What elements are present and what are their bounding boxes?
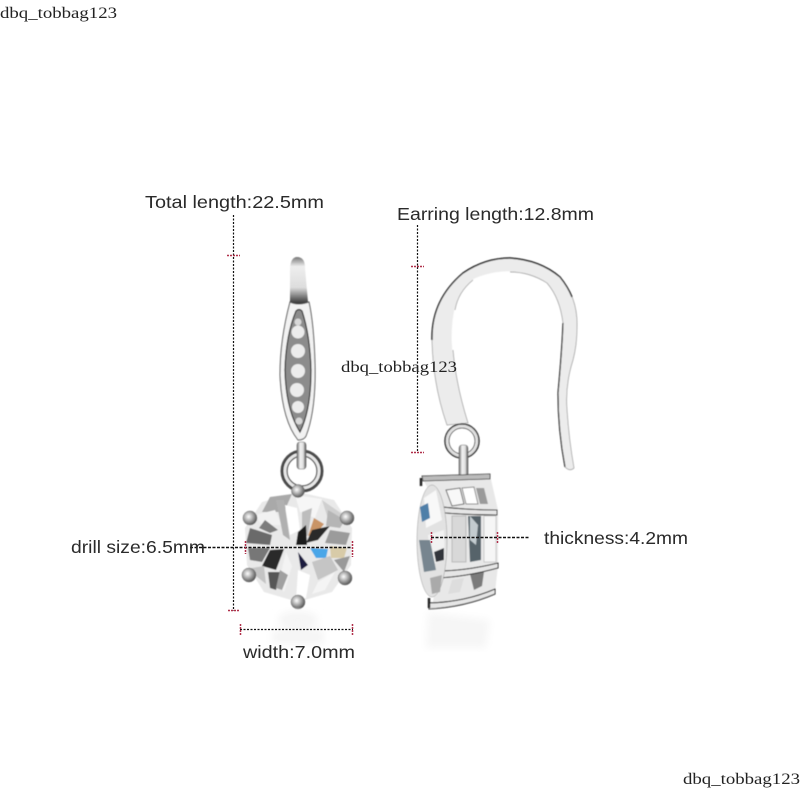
dimension: width [240, 624, 353, 635]
watermark: top left: dbq_tobbag123 [0, 5, 117, 22]
prongs [242, 484, 354, 609]
side earring [417, 258, 577, 609]
label: total length: Total length:22.5mm [145, 192, 324, 212]
label: earring length: Earring length:12.8mm [397, 204, 594, 224]
front earring [242, 257, 354, 609]
label: width: width:7.0mm [242, 642, 355, 662]
front earring reflection [272, 611, 324, 644]
hook loop [290, 257, 308, 304]
label: thickness: thickness:4.2mm [544, 528, 688, 548]
setting [421, 474, 498, 609]
label: drill size: drill size:6.5mm [71, 537, 205, 557]
watermark: bottom right: dbq_tobbag123 [683, 771, 800, 788]
side stone [417, 485, 447, 597]
watermark: centre: dbq_tobbag123 [341, 359, 457, 376]
dimension: total length [227, 215, 240, 611]
bail [297, 442, 306, 469]
ear wire [432, 258, 577, 470]
bail [459, 445, 468, 481]
jump ring [282, 451, 322, 491]
diamond [245, 492, 352, 602]
side earring reflection [426, 612, 490, 648]
pave bar [280, 302, 315, 440]
dimension: earring length [411, 225, 424, 452]
dimension: thickness [431, 532, 530, 544]
jump ring [445, 424, 479, 458]
dimension: drill size [190, 541, 352, 557]
